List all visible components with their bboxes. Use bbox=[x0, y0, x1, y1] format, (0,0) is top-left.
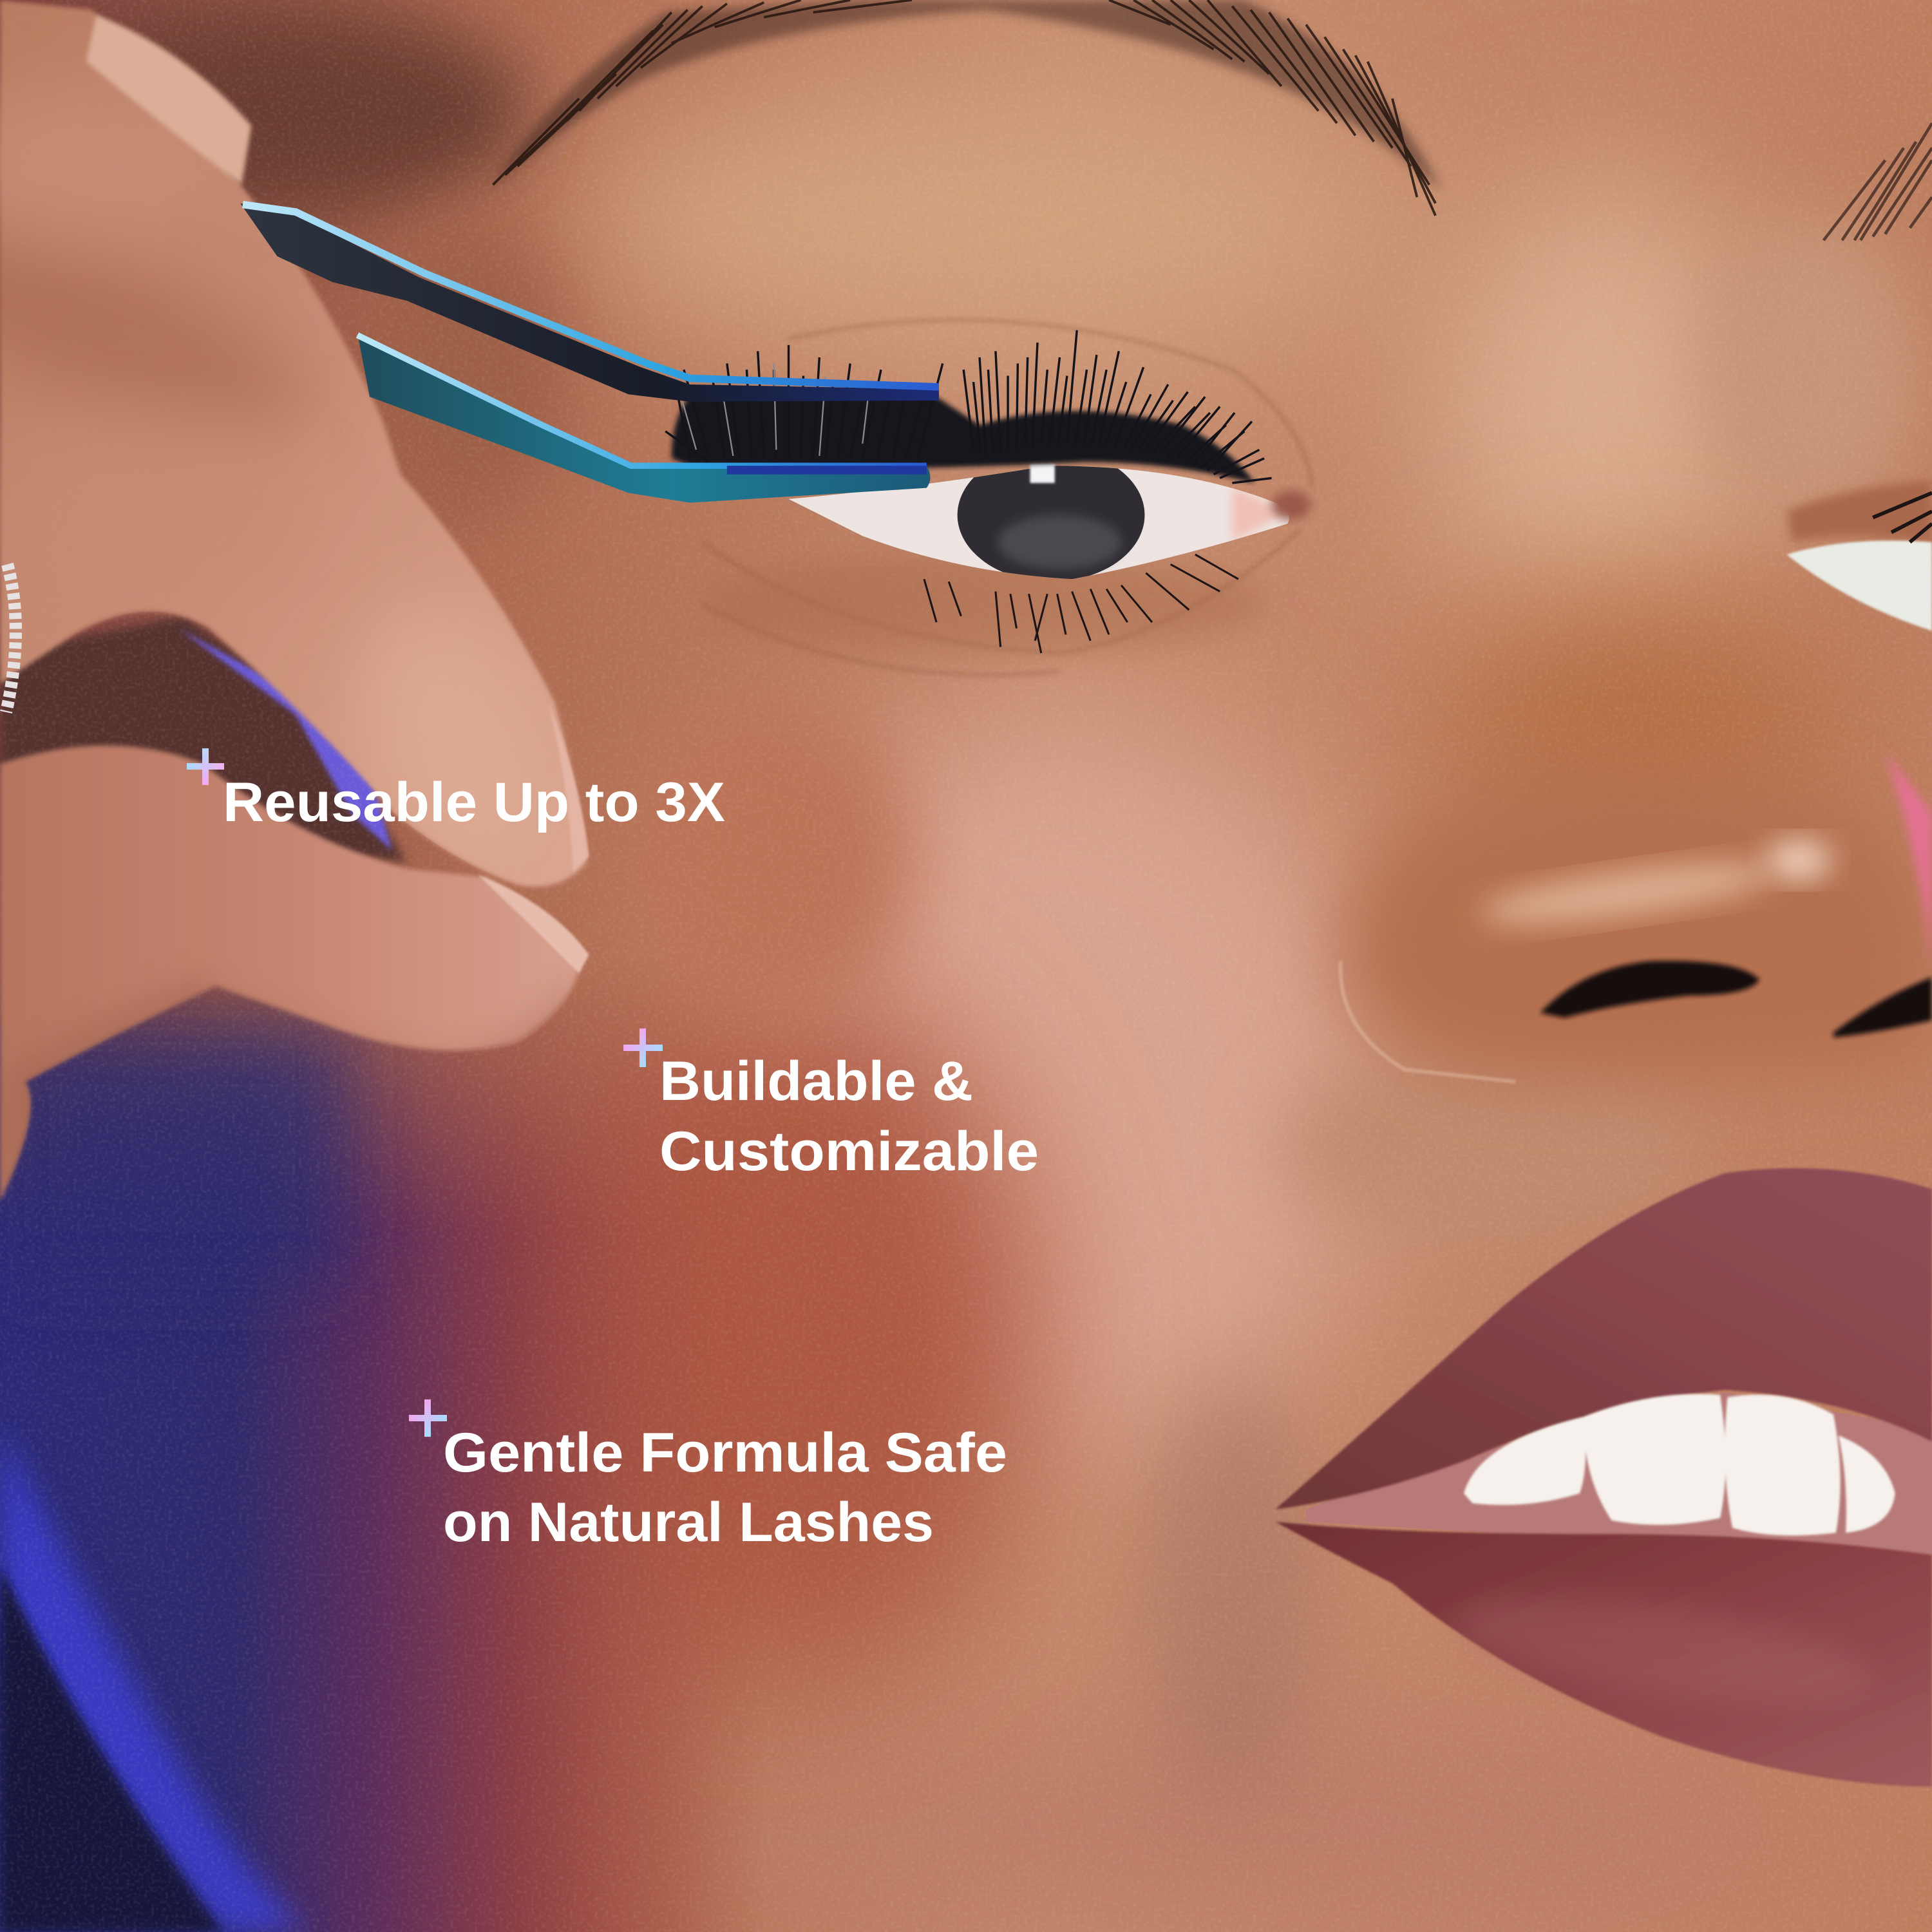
nose highlight bbox=[1477, 851, 1776, 936]
lower arm highlight bbox=[357, 335, 927, 466]
lip highlight bbox=[1450, 1578, 1877, 1724]
label text: on Natural Lashes bbox=[443, 1492, 934, 1553]
thumb body bbox=[0, 746, 579, 1201]
upper tweezer arm bbox=[240, 204, 939, 402]
lower lashes bbox=[924, 554, 1238, 653]
label text: Buildable & bbox=[659, 1050, 973, 1112]
plus icon bbox=[623, 1028, 663, 1067]
side nail bbox=[548, 703, 589, 873]
pink light on nose edge bbox=[1885, 752, 1932, 974]
blue light between fingers bbox=[178, 629, 392, 850]
eye highlight bbox=[1030, 463, 1055, 483]
nose tip highlight bbox=[1767, 840, 1831, 880]
iris bbox=[958, 448, 1287, 582]
blue side light on jaw bbox=[0, 961, 764, 1932]
lower arm tip bbox=[727, 466, 927, 475]
index finger and hand bbox=[0, 0, 589, 896]
label text bbox=[443, 1422, 1007, 1553]
mouth interior bbox=[1306, 1392, 1932, 1555]
shadow under lid bbox=[703, 554, 1269, 653]
callout: gentle formula bbox=[409, 1399, 1007, 1553]
nail bbox=[86, 15, 251, 185]
false lash strip bbox=[665, 330, 1272, 483]
callout: reusable bbox=[187, 748, 725, 833]
upper lip bbox=[1275, 1168, 1932, 1510]
label text: Gentle Formula Safe bbox=[443, 1422, 1007, 1484]
plus icon bbox=[187, 748, 224, 785]
tweezers bbox=[240, 204, 939, 503]
lower lip bbox=[1275, 1522, 1932, 1786]
thumb shading bbox=[0, 974, 579, 1208]
lips bbox=[1275, 1168, 1932, 1786]
teeth bbox=[1464, 1394, 1895, 1535]
ring bbox=[6, 564, 15, 712]
nose bbox=[1340, 752, 1932, 1082]
thumb bbox=[0, 746, 589, 1208]
left nostril bbox=[1540, 961, 1759, 1018]
right nostril bbox=[1833, 977, 1932, 1037]
label text: Reusable Up to 3X bbox=[223, 772, 725, 833]
eyebrow bbox=[493, 0, 1442, 216]
right eyebrow bbox=[1824, 123, 1932, 240]
thumb nail bbox=[478, 875, 589, 974]
left eye bbox=[788, 462, 1314, 580]
label text bbox=[659, 1050, 1039, 1182]
sclera bbox=[789, 466, 1289, 579]
dark gap behind fingers bbox=[0, 616, 406, 862]
finger shading bbox=[0, 86, 583, 896]
label text: Customizable bbox=[659, 1121, 1039, 1182]
upper arm highlight bbox=[243, 205, 939, 387]
eye crease and lower-lid folds bbox=[703, 320, 1312, 675]
eye corner bbox=[1272, 490, 1311, 520]
plus icon bbox=[409, 1399, 447, 1437]
nose shading bbox=[1343, 775, 1932, 1079]
callout: buildable bbox=[623, 1028, 1039, 1182]
nose side crease bbox=[1340, 961, 1515, 1082]
finger body bbox=[0, 0, 587, 887]
lower tweezer arm bbox=[357, 333, 931, 503]
right eye bbox=[1786, 480, 1932, 631]
